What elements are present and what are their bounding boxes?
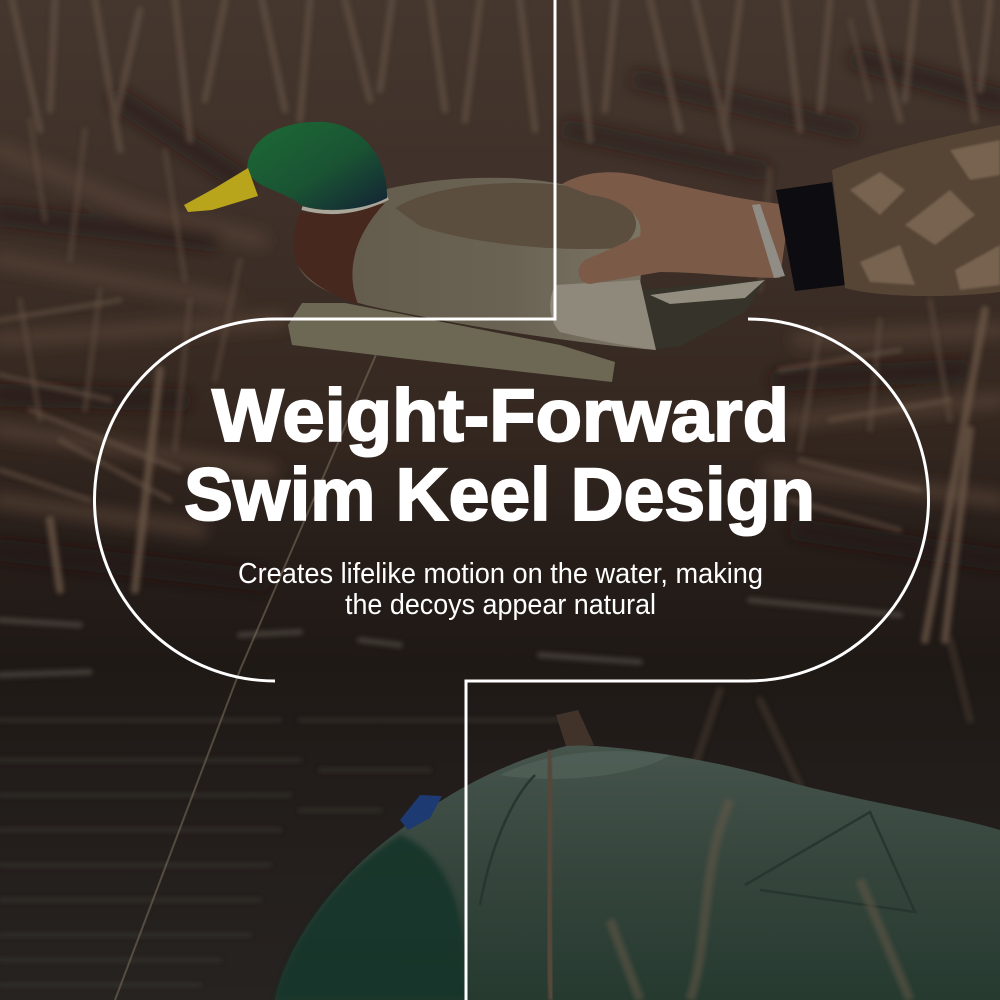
keel bbox=[288, 303, 615, 382]
pale rear flank bbox=[550, 280, 656, 350]
cuff bbox=[776, 182, 846, 291]
title: Swim Keel Design bbox=[184, 453, 815, 536]
stake bbox=[556, 710, 594, 746]
tail bbox=[640, 280, 765, 350]
hand bbox=[562, 172, 790, 284]
subtitle: Creates lifelike motion on the water, making bbox=[238, 558, 763, 590]
title bbox=[184, 374, 815, 536]
camo sleeve bbox=[832, 125, 1000, 296]
title: Weight-Forward bbox=[212, 374, 789, 457]
head bbox=[247, 122, 387, 210]
blue valve bbox=[400, 795, 442, 830]
hand and sleeve bbox=[562, 125, 1000, 296]
neck ring bbox=[302, 198, 388, 212]
subtitle bbox=[238, 558, 763, 621]
wing bbox=[395, 183, 636, 249]
body bbox=[296, 178, 655, 350]
duck decoy bbox=[184, 122, 765, 382]
inflatable boat bbox=[275, 710, 1000, 1000]
chest bbox=[294, 203, 385, 304]
fishing line bbox=[115, 350, 378, 1000]
subtitle: the decoys appear natural bbox=[345, 589, 656, 621]
bill bbox=[184, 168, 258, 212]
